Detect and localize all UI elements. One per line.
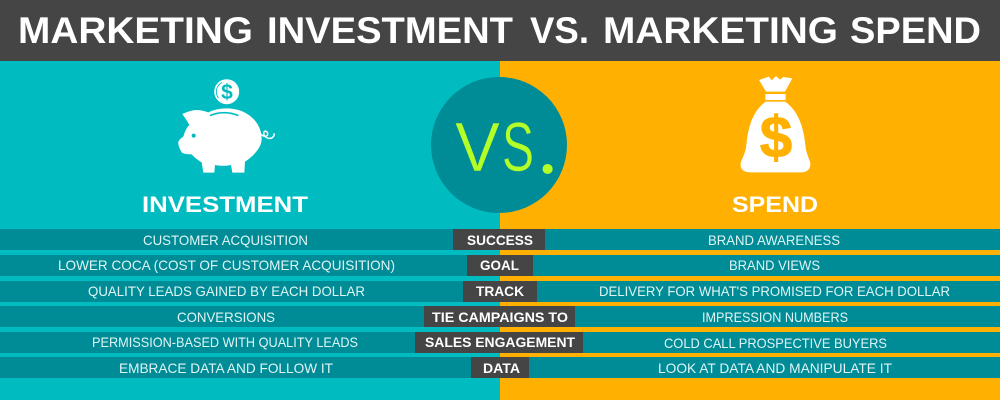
title banner: INVESTMENT (267, 9, 513, 51)
icon: piggy bank with coin (178, 79, 274, 173)
comparison row: success: CUSTOMER ACQUISITION (143, 232, 308, 248)
title banner: SPEND (850, 9, 981, 51)
comparison row: success (0, 229, 1000, 250)
title banner: MARKETING (603, 9, 838, 51)
title banner: MARKETING (18, 9, 253, 51)
panel: investment background (0, 61, 500, 400)
comparison row: success: BRAND AWARENESS (708, 232, 840, 248)
comparison row: data (0, 357, 1000, 378)
comparison row: track: QUALITY LEADS GAINED BY EACH DOLLAR (88, 283, 365, 299)
comparison row: tie campaigns to: CONVERSIONS (177, 309, 275, 325)
comparison row: goal (0, 255, 1000, 276)
vs badge: . (537, 98, 558, 192)
comparison row: track: TRACK (476, 283, 524, 299)
comparison row: sales engagement: COLD CALL PROSPECTIVE BUYERS (664, 335, 887, 351)
comparison row: goal: GOAL (480, 257, 519, 273)
icon: money bag (741, 76, 810, 172)
comparison row: sales engagement: PERMISSION-BASED WITH QUALITY LEADS (92, 334, 358, 350)
title banner (0, 0, 1000, 61)
heading: spend: SPEND (732, 192, 818, 217)
title banner: VS. (530, 9, 589, 51)
comparison row: track: DELIVERY FOR WHAT'S PROMISED FOR EACH DOLLAR (599, 283, 950, 299)
comparison row: sales engagement (0, 332, 1000, 353)
comparison row: tie campaigns to: TIE CAMPAIGNS TO (432, 309, 568, 325)
comparison row: track (0, 281, 1000, 302)
comparison row: tie campaigns to (0, 306, 1000, 327)
panel: spend background (500, 61, 1000, 400)
vs badge: S (502, 108, 534, 186)
comparison row: goal: BRAND VIEWS (729, 257, 820, 273)
comparison row: sales engagement: SALES ENGAGEMENT (425, 334, 575, 350)
comparison row: success: SUCCESS (467, 232, 533, 248)
comparison row: tie campaigns to: IMPRESSION NUMBERS (702, 309, 848, 325)
icon: money bag: $ (760, 105, 792, 170)
comparison row: data: LOOK AT DATA AND MANIPULATE IT (658, 360, 892, 376)
comparison row: data: EMBRACE DATA AND FOLLOW IT (119, 360, 333, 376)
comparison row: goal: LOWER COCA (COST OF CUSTOMER ACQUISITION) (58, 257, 395, 273)
comparison row: data: DATA (483, 360, 520, 376)
heading: investment: INVESTMENT (142, 192, 308, 217)
vs badge: V (455, 108, 500, 186)
icon: piggy bank with coin: $ (221, 81, 233, 104)
vs badge (431, 77, 567, 213)
